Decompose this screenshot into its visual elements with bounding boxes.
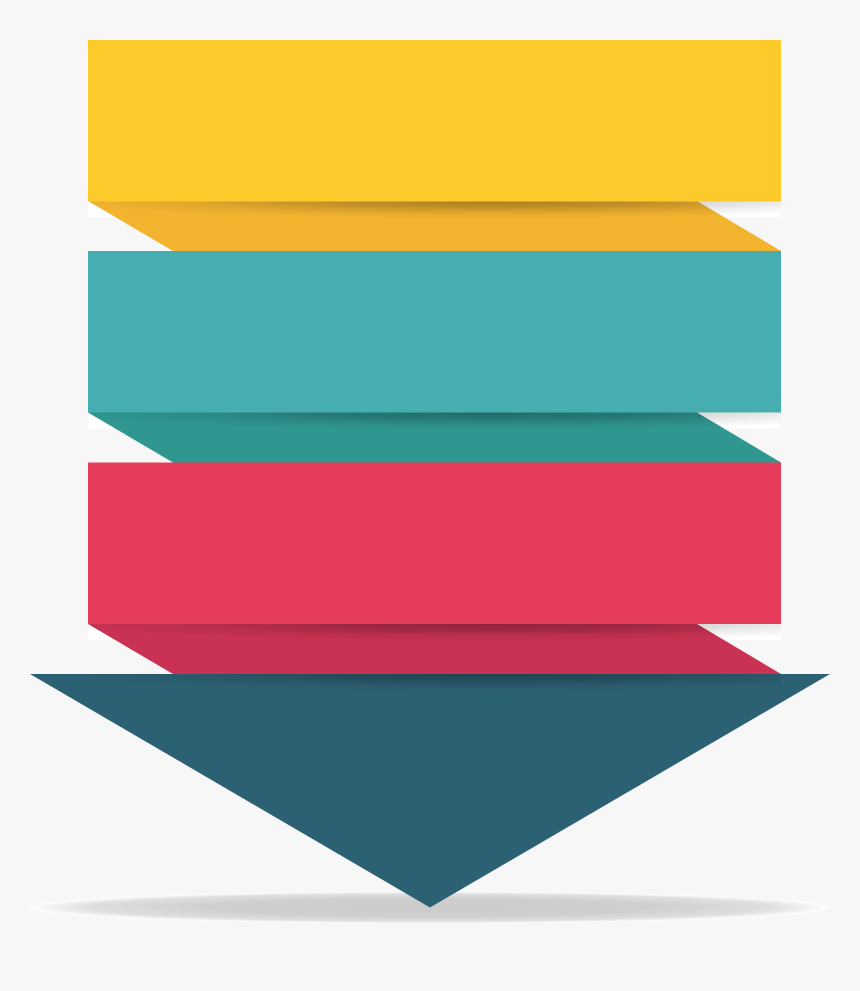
- ground shadow: [28, 892, 832, 924]
- fold shadow: red: [88, 624, 781, 641]
- fold backing: yellow: [88, 201, 781, 217]
- fold backing: teal: [88, 412, 781, 428]
- fold shadow: yellow: [88, 201, 781, 218]
- fold backing: red: [88, 624, 781, 640]
- arrow head: [30, 674, 830, 908]
- ribbon 3: red: [88, 462, 781, 674]
- fold: teal: [88, 412, 781, 462]
- ribbon 2: teal: [88, 251, 781, 462]
- panel: yellow: [88, 40, 781, 202]
- arrow top shadow: [88, 674, 781, 691]
- arrow triangle: [30, 674, 830, 908]
- fold: yellow: [88, 201, 781, 251]
- fold: red: [88, 624, 781, 674]
- panel: teal: [88, 251, 781, 412]
- ribbon 1: yellow: [88, 40, 781, 251]
- panel: red: [88, 462, 781, 624]
- fold shadow: teal: [88, 412, 781, 430]
